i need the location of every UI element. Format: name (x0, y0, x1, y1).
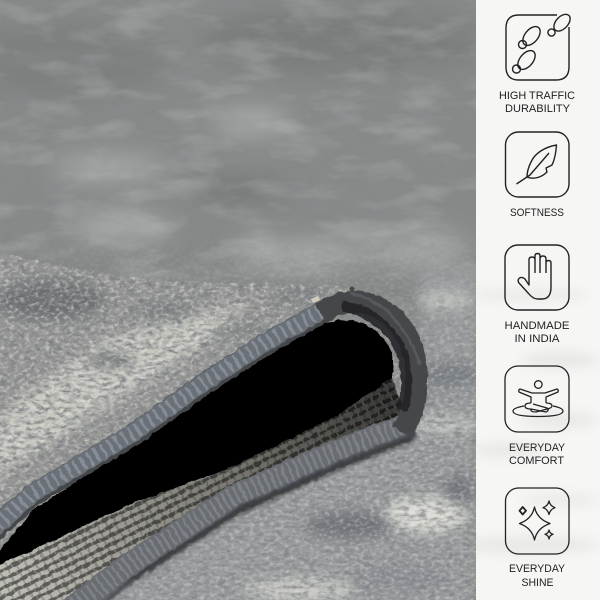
rolled rug fold (0, 240, 420, 600)
label: SOFTNESS (510, 207, 564, 219)
feature: high traffic durability (499, 11, 575, 115)
icon: feather (506, 132, 569, 197)
front lower hem (70, 423, 412, 600)
feature: high traffic durability: DURABILITY (505, 103, 571, 115)
underside striped band (0, 370, 415, 600)
feature: everyday shine (506, 488, 569, 589)
shadow under fold (120, 432, 418, 587)
feature: everyday comfort: COMFORT (509, 455, 564, 467)
background mottled pattern (0, 5, 480, 270)
feature: everyday shine: SHINE (522, 577, 554, 589)
fold top surface (0, 254, 355, 508)
feature: handmade in india (504, 245, 570, 345)
label: EVERYDAY (509, 442, 566, 454)
black fold interior (0, 320, 394, 572)
label: HIGH TRAFFIC (499, 90, 575, 102)
feature: everyday comfort (505, 366, 569, 467)
carpet pile texture (0, 264, 476, 600)
icon: hand (505, 245, 569, 310)
feature: softness (506, 132, 569, 219)
photo: folded grey rug (0, 0, 480, 600)
label: EVERYDAY (509, 563, 566, 575)
label: HANDMADE (504, 320, 570, 332)
icon: sparkles (506, 488, 569, 554)
floor rug right and lower right (90, 270, 476, 600)
icon: footprints (506, 11, 573, 80)
side panel (476, 0, 600, 600)
feature: handmade in india: IN INDIA (514, 333, 560, 345)
upper hem wrapping around the fold (0, 302, 417, 532)
icon: meditation (505, 366, 569, 432)
